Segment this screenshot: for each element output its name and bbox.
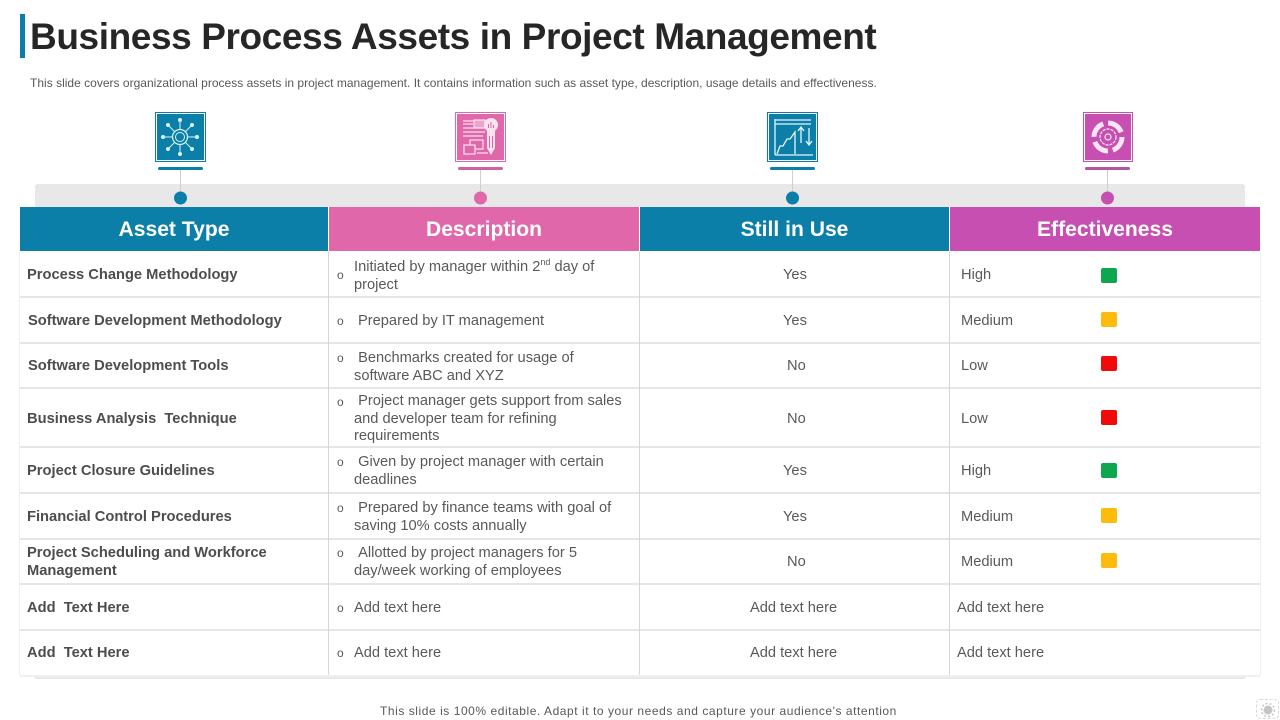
row: Add Text Here 1: Add Text Here [27, 600, 130, 616]
row: Project Scheduling and Workforce Management: Allotted by project managers for 5 [358, 545, 577, 561]
grey band behind table [35, 184, 1245, 207]
row: Add Text Here 2: Add text here [354, 645, 441, 661]
row: Project Scheduling and Workforce Management [27, 545, 1117, 579]
grey band below table [35, 675, 1245, 679]
row: Financial Control Procedures: Medium [961, 509, 1013, 525]
row: Software Development Methodology: Medium [961, 313, 1013, 329]
row: Process Change Methodology [27, 257, 1117, 293]
row: Add Text Here 2: Add Text Here [27, 645, 130, 661]
row: Software Development Methodology [28, 312, 1117, 329]
row: Project Closure Guidelines: Project Closure Guidelines [27, 463, 215, 479]
row: Project Closure Guidelines [27, 454, 1117, 488]
row: Business Analysis Technique: requirements [354, 428, 439, 444]
row: Software Development Methodology: o [337, 314, 344, 328]
row: Add Text Here 1 [27, 600, 1044, 616]
header: Effectiveness: Effectiveness [1037, 218, 1173, 241]
row: Process Change Methodology: Process Change Methodology [27, 267, 238, 283]
row: Add Text Here 2: Add text here [750, 645, 837, 661]
footer note: This slide is 100% editable. Adapt it to your needs and capture your audience's attention [380, 704, 897, 718]
row: Software Development Methodology: Yes [783, 313, 807, 329]
row: Project Scheduling and Workforce Management: day/week working of employees [354, 563, 562, 579]
header: Description [329, 207, 639, 251]
icon: report with light bulb pencil [455, 112, 506, 204]
icon: gear badge [1256, 699, 1279, 719]
title: Business Process Assets in Project Management [30, 16, 876, 57]
row: Project Scheduling and Workforce Management: Management [27, 563, 117, 579]
row: Software Development Methodology: Prepared by IT management [358, 313, 544, 329]
row: Project Scheduling and Workforce Management: o [337, 546, 344, 560]
header: Still in Use [640, 207, 949, 251]
row: Project Scheduling and Workforce Management: No [787, 554, 806, 570]
row: Financial Control Procedures: Financial Control Procedures [27, 509, 232, 525]
row: Business Analysis Technique: No [787, 411, 806, 427]
header: Asset Type [20, 207, 328, 251]
row: Process Change Methodology: High [961, 267, 991, 283]
row: Business Analysis Technique: Project manager gets support from sales [358, 393, 622, 409]
row: Project Closure Guidelines: Yes [783, 463, 807, 479]
row: Software Development Methodology: Software Development Methodology [28, 313, 282, 329]
header: Effectiveness [950, 207, 1260, 251]
row: Software Development Tools: No [787, 358, 806, 374]
row: Software Development Tools: Software Development Tools [28, 358, 228, 374]
row: Business Analysis Technique [27, 393, 1117, 444]
row: Financial Control Procedures: saving 10% costs annually [354, 518, 527, 534]
row: Add Text Here 2 [27, 645, 1044, 661]
header: Still in Use: Still in Use [741, 218, 848, 241]
row: Process Change Methodology: Yes [783, 267, 807, 283]
row: Financial Control Procedures: Prepared by finance teams with goal of [358, 500, 611, 516]
row: Project Closure Guidelines: deadlines [354, 472, 417, 488]
row: Business Analysis Technique: and developer team for refining [354, 410, 557, 426]
header: Description: Description [426, 218, 542, 241]
icon: network with dollar [155, 112, 206, 204]
subtitle: This slide covers organizational process assets in project management. It contains information such as asset type, description, usage details and effectiveness. [30, 76, 877, 90]
row: Process Change Methodology: Initiated by manager within 2nd day of [354, 257, 594, 275]
icon: gear in circular arrows [1083, 112, 1133, 204]
title accent bar [20, 14, 25, 58]
row: Business Analysis Technique: Low [961, 411, 988, 427]
row: Process Change Methodology: project [354, 277, 398, 293]
row: Business Analysis Technique: Business Analysis Technique [27, 411, 237, 427]
row: Financial Control Procedures: Yes [783, 509, 807, 525]
row: Project Closure Guidelines: High [961, 463, 991, 479]
row: Add Text Here 2: Add text here [957, 645, 1044, 661]
row: Process Change Methodology: o [337, 268, 344, 282]
row: Add Text Here 1: Add text here [750, 600, 837, 616]
row: Software Development Tools: Benchmarks created for usage of [358, 350, 574, 366]
row: Project Closure Guidelines: Given by project manager with certain [358, 454, 604, 470]
row: Add Text Here 2: o [337, 646, 344, 660]
row: Project Scheduling and Workforce Management: Project Scheduling and Workforce [27, 545, 267, 561]
row: Project Scheduling and Workforce Management: Medium [961, 554, 1013, 570]
row: Software Development Tools: Low [961, 358, 988, 374]
row: Financial Control Procedures: o [337, 501, 344, 515]
row: Add Text Here 1: Add text here [957, 600, 1044, 616]
row: Software Development Tools: software ABC and XYZ [354, 368, 504, 384]
row: Software Development Tools: o [337, 351, 344, 365]
row: Add Text Here 1: o [337, 601, 344, 615]
row: Software Development Tools [28, 350, 1117, 384]
header: Asset Type: Asset Type [118, 218, 229, 241]
icon: chart with arrows [767, 112, 818, 204]
row: Project Closure Guidelines: o [337, 455, 344, 469]
row: Business Analysis Technique: o [337, 395, 344, 409]
row: Add Text Here 1: Add text here [354, 600, 441, 616]
row: Financial Control Procedures [27, 500, 1117, 534]
